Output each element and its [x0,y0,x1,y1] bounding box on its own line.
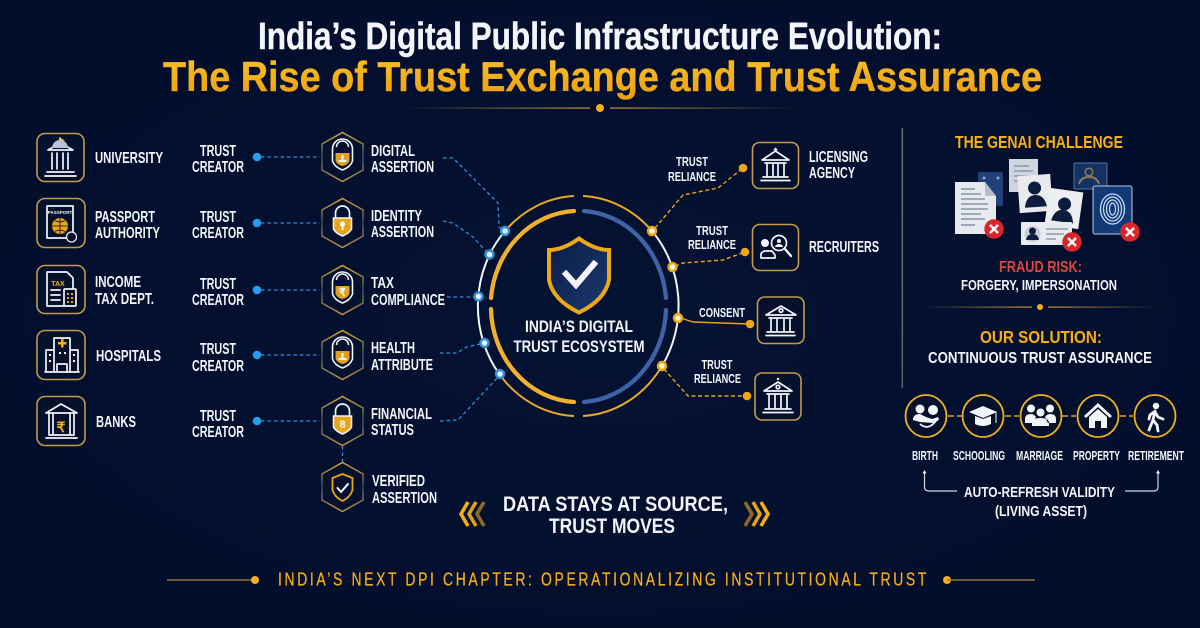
right panel divider [902,128,903,388]
id card [1021,222,1072,245]
icon: shield hexagon [322,462,363,512]
outer ring [478,196,679,416]
label: trust creator: CREATOR [192,424,244,441]
icon: shield with check [549,238,609,312]
label: STATUS [371,422,414,439]
university row [37,134,320,182]
icon: bank [755,373,801,420]
connector [253,417,320,425]
label: trust reliance: RELIANCE [668,169,716,184]
label: ATTRIBUTE [371,357,433,374]
label: VERIFIED [372,473,425,490]
income tax row [37,266,320,314]
label: banks: BANKS [96,414,136,431]
connector [253,286,320,294]
verified assertion [322,462,437,512]
connector [253,351,320,359]
footer text: INDIA’S NEXT DPI CHAPTER: OPERATIONALIZING INSTITUTIONAL TRUST [278,568,929,590]
portrait two [1045,188,1083,229]
life stage labels [912,448,1184,463]
recruiters row [675,223,879,270]
left rule [167,576,259,584]
icon: bank: ₹ [57,419,66,435]
connector [681,318,754,328]
connector [675,248,749,266]
fingerprint card [1093,186,1132,234]
label: trust creator: TRUST [200,341,236,358]
label: trust reliance: RELIANCE [694,371,741,386]
icon: university [37,134,84,182]
life stage labels: PROPERTY [1073,448,1120,463]
label: ASSERTION [371,159,434,176]
label: trust creator: TRUST [200,143,236,160]
label: recruiters: RECRUITERS [809,239,879,256]
label: income tax dept: TAX DEPT. [95,291,154,308]
message text: DATA STAYS AT SOURCE, [503,492,728,516]
label: HEALTH [371,340,415,357]
main document [955,182,996,234]
auto refresh text: (LIVING ASSET) [995,503,1087,520]
back paper [1009,159,1038,192]
hub label: TRUST ECOSYSTEM [514,337,644,356]
icon: bank [37,396,85,446]
icon: retirement [1134,395,1176,437]
arrow: refresh loop right [1125,470,1160,491]
column: assertions [322,132,445,512]
hospitals row [37,330,320,380]
label: trust creator: CREATOR [192,225,244,242]
passport row [37,198,320,248]
icon: left chevrons [461,502,484,526]
central hub: digital trust ecosystem [474,196,682,416]
heading: OUR SOLUTION: [980,327,1102,347]
connector [655,164,747,228]
label: COMPLIANCE [371,292,445,309]
heading: THE GENAI CHALLENGE [955,132,1123,152]
icon: lock hexagon [322,198,363,248]
panel: our solution [906,327,1184,520]
icon: x badge document [984,219,1004,239]
life stage connectors [948,415,1133,417]
label: trust creator: TRUST [200,276,236,293]
blue nodes [474,227,509,378]
label: licensing agency: AGENCY [809,165,855,182]
column: trust relying parties [655,142,879,420]
icon: tax document [37,266,85,314]
hub label: INDIA’S DIGITAL [525,317,633,336]
fraud risk heading: FRAUD RISK: [999,259,1082,276]
connector [253,153,320,161]
label: trust creator: CREATOR [192,358,244,375]
title [163,16,1042,112]
gold nodes [648,227,682,370]
footer banner [167,568,1035,590]
fraud risk text: FORGERY, IMPERSONATION [961,278,1117,294]
title line 2: The Rise of Trust Exchange and Trust Assurance [163,53,1042,100]
dark scan card [1074,163,1107,189]
tax compliance [322,266,445,314]
label: consent: CONSENT [699,305,745,320]
subheading: CONTINUOUS TRUST ASSURANCE [928,350,1152,367]
label: passport authority: PASSPORT [95,209,155,226]
icon: property [1078,395,1118,437]
right rule [943,576,1035,584]
label: passport authority: AUTHORITY [95,225,160,242]
life stage labels: BIRTH [912,448,938,463]
label: hospitals: HOSPITALS [96,348,161,365]
arrow: refresh loop left [922,470,957,491]
inner ring [491,211,666,402]
label: trust creator: TRUST [200,408,236,425]
icon: hospital [37,330,85,380]
icon: bank [758,297,804,344]
icon: licensing agency [752,142,798,188]
icon: lock hexagon [322,330,363,380]
icon: lock hexagon [322,132,363,182]
connector: financial status to verified [342,446,344,463]
section divider [920,304,1160,310]
icon: birth [906,395,946,437]
icon: passport: PASSPORT [48,210,72,215]
fourth reliance row [664,357,801,420]
illustration: forged documents [955,159,1140,252]
icon: right chevrons [745,502,768,526]
label: TAX [371,275,395,292]
message text: TRUST MOVES [549,514,675,538]
column: trust creators [37,134,320,446]
bottom message: data stays at source [461,492,768,538]
life stage labels: SCHOOLING [953,448,1005,463]
label: licensing agency: LICENSING [809,149,868,166]
label: university: UNIVERSITY [95,150,163,167]
licensing agency row [655,142,868,228]
connector [664,369,751,400]
life stage labels: MARRIAGE [1016,448,1063,463]
health attribute [322,330,433,380]
panel: genai challenge [955,132,1140,294]
title line 1: India’s Digital Public Infrastructure Evolution: [258,16,942,58]
icon: x badge id [1062,232,1082,252]
label: FINANCIAL [371,406,432,423]
label: trust reliance: TRUST [702,357,733,372]
label: trust reliance: RELIANCE [688,237,736,252]
icon: tax document: TAX [51,281,65,288]
banks row [37,396,320,446]
financial status [322,396,432,446]
title divider [400,104,800,112]
icon: recruiters [752,224,798,270]
label: trust creator: TRUST [200,209,236,226]
label: IDENTITY [371,208,422,225]
label: DIGITAL [371,143,415,160]
label: trust reliance: TRUST [696,223,728,238]
identity assertion [322,198,434,248]
icon: marriage [1020,395,1062,437]
digital assertion [322,132,434,182]
icon: schooling [962,395,1004,437]
connector [253,219,320,227]
icon: x badge fingerprint [1120,222,1140,242]
label: trust creator: CREATOR [192,159,244,176]
icon: lock hexagon: ₹ [339,287,346,299]
label: income tax dept: INCOME [95,274,141,291]
icon: lock hexagon: 8 [339,419,346,431]
back blue document [978,172,1003,206]
connectors: assertions to hub [440,158,505,421]
label: ASSERTION [371,224,434,241]
label: ASSERTION [372,490,437,507]
label: trust creator: CREATOR [192,292,244,309]
portrait one [1017,174,1053,213]
icon: passport [37,198,85,248]
label: trust reliance: TRUST [676,154,708,169]
auto refresh text: AUTO-REFRESH VALIDITY [964,484,1115,501]
consent row [681,297,804,344]
